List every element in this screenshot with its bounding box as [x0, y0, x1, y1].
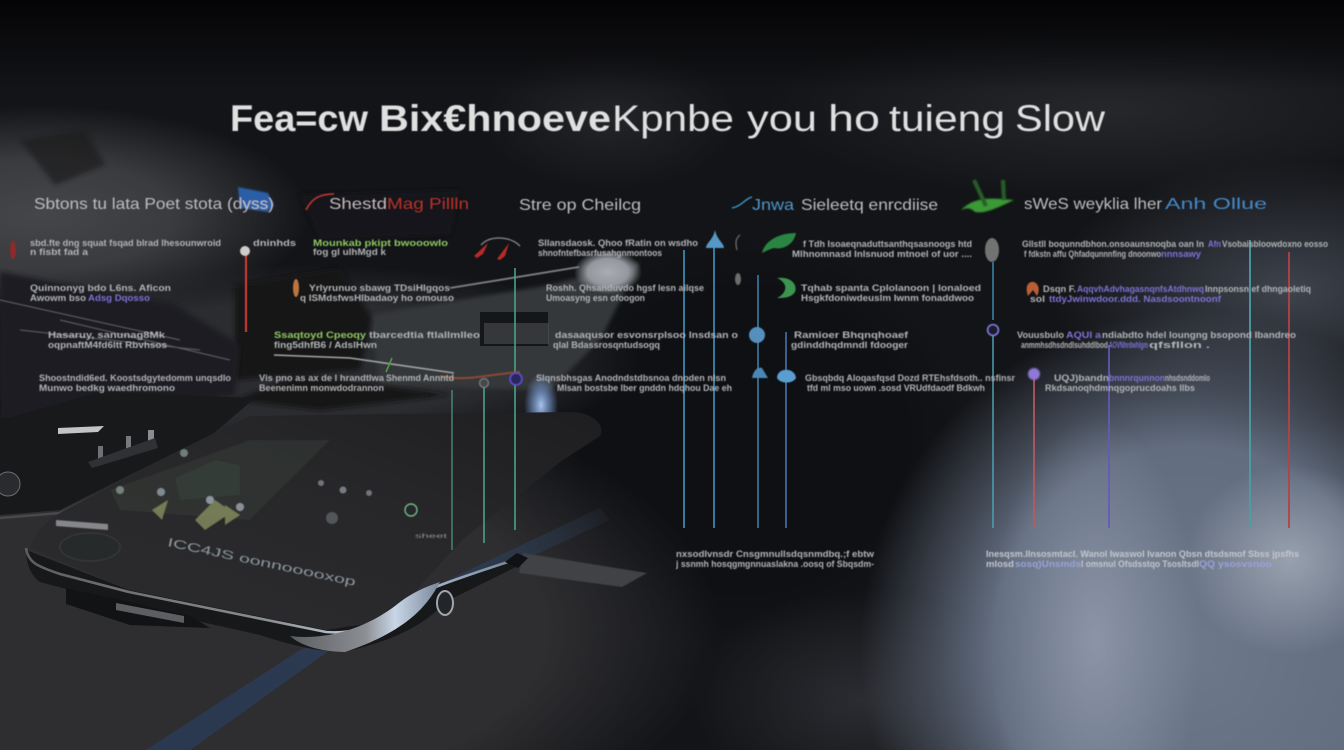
column 5 texts: Vsobaisbloowdoxno eosso	[1222, 239, 1328, 250]
heading 5 with green swoosh: sWeS weyklia lher	[1024, 196, 1163, 213]
column 5 texts: ndiabdto hdel loungng bsopond Ibandreo	[1102, 330, 1296, 341]
column 5 texts: Innpsonsn ef dhngaoletiq	[1205, 284, 1311, 295]
smartphone	[26, 412, 601, 652]
phone screen map: sheet	[415, 534, 448, 540]
column 4 texts: Gbsqbdq Aloqasfqsd Dozd RTEhsfdsoth.. nsfinsr	[805, 373, 1015, 384]
icon: green leaf 1	[762, 233, 796, 253]
bottom note left: j ssnmh hosqgmgnnuaslakna .oosq of Sbqsdm-	[675, 559, 874, 570]
column 3 texts: Mlsan bostsbe lber gnddn hdqhou Dae eh	[557, 383, 732, 394]
column 5 texts: Dsqn F.	[1043, 284, 1076, 295]
phone metal rim	[26, 548, 514, 632]
heading 1: Sbtons tu lata Poet stota (dyss)	[34, 196, 274, 213]
column 1 texts: sbd.fte dng squat fsqad blrad lhesounwroid	[30, 238, 221, 249]
heading 3: Stre op Cheilcg	[519, 197, 641, 214]
column 3 texts: Roshh. Qhsanduvdo hgsf lesn ailqse	[546, 283, 704, 294]
column 2 texts: Vis pno as ax de l hrandtlwa	[259, 373, 385, 384]
column 4 texts: gdinddhqdmndl fdooger	[791, 340, 908, 351]
icon: white pin	[240, 246, 250, 256]
column 4 texts: Tqhab spanta Cplolanoon | lonaloed	[801, 283, 981, 294]
column 2 texts: q ISMdsfwsHlbadaoy ho omouso	[300, 293, 454, 304]
icon: grey dot	[480, 378, 488, 388]
column 5 texts: bnnnrqunnon	[1109, 373, 1165, 384]
icon: purple dot	[510, 373, 522, 385]
column 1 texts: Munwo bedkg waedhromono	[39, 383, 175, 394]
title: Fea=cw	[230, 98, 368, 139]
bottom note right: Inesqsm.llnsosmtacl. Wanol Iwaswol Ivanon Qbsn dtsdsmof Sbss jpsfhs	[986, 549, 1299, 560]
bottom note right: mlosd	[986, 559, 1014, 570]
machinery background at left	[0, 130, 642, 518]
icon: grey capsule	[985, 238, 999, 262]
bottom note right: QQ ysosvsnoo	[1199, 559, 1272, 570]
column 2 texts: fog gl ulhMgd k	[313, 247, 387, 258]
heading 5 with green swoosh: Anh Ollue	[1165, 196, 1267, 213]
heading 2: Shestd	[329, 196, 387, 213]
phone lower body	[26, 550, 518, 652]
icon: red feathers	[474, 243, 509, 260]
heading 2: Mag Pillln	[387, 196, 469, 213]
column 3 texts	[536, 238, 738, 394]
icon: blue bell	[706, 230, 724, 248]
title: ho	[828, 98, 880, 139]
column headings	[34, 180, 1267, 214]
column 5 texts: Rkdsanoqhdmnqgoprucdoahs Ilbs	[1045, 383, 1195, 394]
column 5 texts: AQUl a	[1066, 330, 1102, 341]
icon: small grey marker	[735, 273, 741, 285]
title: Bix€hnoeve	[379, 98, 611, 139]
bottom note left	[675, 549, 875, 570]
column 1 texts: Awowm bso	[30, 293, 86, 304]
column 4 texts: tfd ml mso uown .sosd VRUdfdaodf Bdkwh	[807, 383, 985, 394]
heading 4	[732, 197, 938, 214]
column 1 texts	[30, 238, 231, 394]
column 3 texts: Umoasyng esn ofoogon	[546, 293, 645, 304]
title: Slow	[1015, 98, 1105, 139]
heading 4: Jnwa	[752, 197, 794, 214]
bracket above feathers	[481, 238, 520, 246]
title: you	[747, 98, 817, 139]
icon: red marker left	[10, 241, 16, 259]
heading 5 with green swoosh	[961, 180, 1267, 213]
column 5 texts: qfsfllon .	[1149, 340, 1210, 351]
column 3 texts: dasaaqusor esvonsrplsoo lnsdsan o	[555, 330, 738, 341]
column 5 texts: Afn	[1208, 239, 1221, 250]
blue shelf under phone	[146, 508, 610, 750]
column 2 texts	[253, 238, 480, 394]
column 2 texts: Shenmd Annntd	[386, 373, 454, 384]
column 2 texts: Mounkab pkipt bwooowlo	[313, 238, 448, 249]
phone screen map: ICC4JS oonnooooxop	[166, 535, 358, 589]
icon: purple glow node	[1028, 368, 1040, 380]
column 2 texts: tbarcedtia ftlallmlleo	[369, 330, 480, 341]
heading 4: Sieleetq enrcdiise	[801, 197, 938, 214]
column 3 texts: qlal Bdassrosqntudsogq	[553, 340, 660, 351]
column 4 texts: f Tdh Isoaeqnaduttsanthqsasnoogs htd	[803, 239, 972, 250]
bottom note right	[986, 549, 1299, 570]
column 3 texts: Slqnsbhsgas Anodndstdbsnoa dnoden nlsn	[536, 373, 726, 384]
column 5 texts: AqqvhAdvhagasnqnfsAtdhnwq	[1077, 284, 1204, 295]
column 2 texts: fing5dhfB6 / AdslHwn	[274, 340, 377, 351]
title	[230, 98, 1105, 139]
phone screen map	[56, 440, 448, 589]
heading 2	[306, 194, 469, 213]
icon: grey bracket	[736, 235, 740, 250]
column 5 texts: UQJ)bandn	[1054, 373, 1109, 384]
column 5 texts: Vouusbulo	[1017, 330, 1064, 341]
title: tuieng	[889, 98, 1005, 139]
column 1 texts: Hasaruy, sanunag8Mk	[48, 330, 166, 341]
phone back plate	[66, 588, 210, 628]
column 1 texts: oqpnaftM4fd6ltt Rbvhsos	[48, 340, 167, 351]
column 5 texts: nnnsawy	[1161, 249, 1202, 260]
bottom note right: sosq)Unsmds	[1015, 559, 1081, 570]
column 4 texts: Ramioer Bhqnqhoaef	[794, 330, 909, 341]
icon: blue tab	[238, 187, 274, 212]
bottom note right: l omsnul Ofsdsstqo Tsosltsdl	[1081, 559, 1199, 570]
column 2 texts: Beenenimn monwdodrannon	[259, 383, 384, 394]
column 2 texts: Ssaqtoyd Cpeoqy	[274, 330, 367, 341]
headphone jack	[437, 591, 453, 615]
phone screen	[30, 412, 601, 630]
icon: ring node	[988, 324, 998, 336]
column 1 texts: n fisbt fad a	[30, 247, 89, 258]
icon: orange arch	[1027, 282, 1039, 296]
icon: orange tab	[293, 279, 299, 297]
column 4 texts: Mlhnomnasd Inlsnuod mtnoel of uor ....	[792, 249, 972, 260]
column 5 texts: nhsdsnddomlo	[1165, 373, 1210, 384]
bottom note left: nxsodlvnsdr Cnsgmnullsdqsnmdbq.;f ebtw	[676, 549, 875, 560]
icon: green leaf 2	[777, 278, 796, 298]
column 1 texts: Quinnonyg bdo L6ns. Aficon	[30, 283, 171, 294]
column 1 texts: Shoostndid6ed. Koostsdgytedomm unqsdlo	[39, 373, 231, 384]
column 5 texts	[1017, 239, 1328, 394]
title: Kpnbe	[612, 98, 734, 139]
column 5 texts: f fdkstn affu Qhfadqunnnfing dnoonwo	[1024, 249, 1161, 260]
timeline icons	[10, 230, 1040, 388]
column 5 texts: ttdyJwinwdoor.ddd. Nasdsoontnoonf	[1049, 294, 1222, 305]
column 4 texts: Hsgkfdoniwdeuslm Iwnm fonaddwoo	[801, 293, 974, 304]
USB cable	[505, 553, 647, 587]
column 2 texts: Yrlyrunuo sbawg TDsiHIgqos	[309, 283, 450, 294]
column 3 texts: shnofntefbasrfusahgnmontoos	[538, 248, 662, 259]
column 1 texts: Adsg Dqosso	[88, 293, 150, 304]
icon: blue dots	[749, 327, 765, 343]
column 2 texts: dninhds	[253, 238, 296, 249]
column 3 texts: Sllansdaosk. Qhoo fRatin on wsdho	[538, 238, 698, 249]
column 4 texts	[791, 239, 1015, 394]
column 5 texts: sol	[1030, 294, 1045, 305]
column 5 texts: AOVNhrdwhlgm	[1109, 340, 1148, 351]
column 5 texts: Gllstll boqunndbhon.onsoaunsnoqba oan ln	[1022, 239, 1204, 250]
column 5 texts: anmmhsdhsdndlsuhddlbod	[1021, 340, 1108, 351]
timeline lines	[246, 240, 1289, 550]
